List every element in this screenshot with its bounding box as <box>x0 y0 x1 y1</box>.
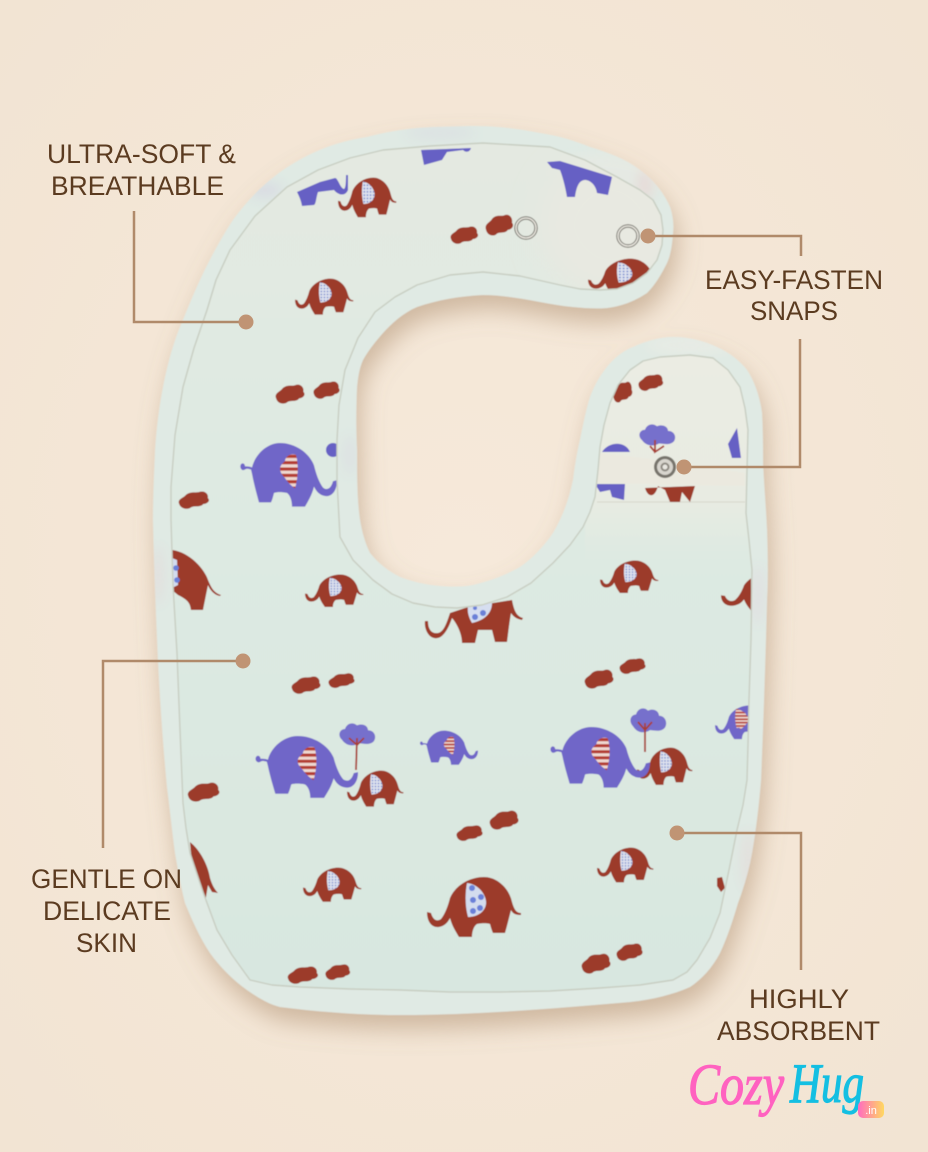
seam stitching <box>171 143 752 992</box>
label: DELICATE <box>43 896 171 926</box>
label: SNAPS <box>750 296 838 326</box>
bib shadow <box>157 140 772 1029</box>
neck band fold shading <box>158 174 758 870</box>
prints clipped to centre panel <box>172 148 815 984</box>
label: ULTRA-SOFT & <box>47 139 236 169</box>
label: EASY-FASTEN <box>705 265 883 295</box>
callout: gentle on delicate skin <box>31 654 250 958</box>
tab overlay panel <box>592 356 747 513</box>
leader line <box>134 211 254 330</box>
right partial elephants <box>714 578 752 740</box>
leader lines to both snaps <box>640 228 801 474</box>
red elephant under neck band <box>425 600 523 643</box>
label <box>47 139 236 201</box>
leader line <box>670 826 801 970</box>
logo: Cozy Hug .in: Cozy <box>688 1052 784 1117</box>
logo: Cozy Hug .in <box>688 1052 884 1118</box>
fabric centre panel <box>171 143 752 992</box>
label: HIGHLY <box>749 984 849 1014</box>
snap: tab stud <box>654 456 676 478</box>
bib binding <box>153 126 768 1015</box>
elephant prints and clouds <box>172 148 815 984</box>
large red elephant with dotted ear <box>427 877 521 937</box>
snap: upper right ring <box>618 226 638 246</box>
label <box>705 265 883 326</box>
label: BREATHABLE <box>51 171 224 201</box>
logo: Cozy Hug .in: Hug <box>789 1053 864 1115</box>
leader line <box>103 654 250 848</box>
label <box>31 864 182 958</box>
label: SKIN <box>76 928 137 958</box>
label: GENTLE ON <box>31 864 182 894</box>
strap red elephant <box>588 258 650 290</box>
callout: highly absorbent <box>670 826 880 1046</box>
snap: upper left ring <box>516 218 536 238</box>
.in badge <box>858 1101 884 1118</box>
.in badge: .in <box>865 1105 877 1117</box>
left partial red elephants <box>172 550 221 903</box>
soft lighter strap fabric <box>540 155 680 295</box>
label: ABSORBENT <box>717 1016 880 1046</box>
callout: easy-fasten snaps <box>640 228 883 474</box>
label <box>717 984 880 1046</box>
callout: ultra-soft and breathable <box>47 139 254 330</box>
red print below webbing <box>645 486 695 502</box>
product photo: elephant print bib <box>152 126 815 1029</box>
clipped blue shapes at top <box>297 148 741 500</box>
webbing strip <box>597 453 745 486</box>
